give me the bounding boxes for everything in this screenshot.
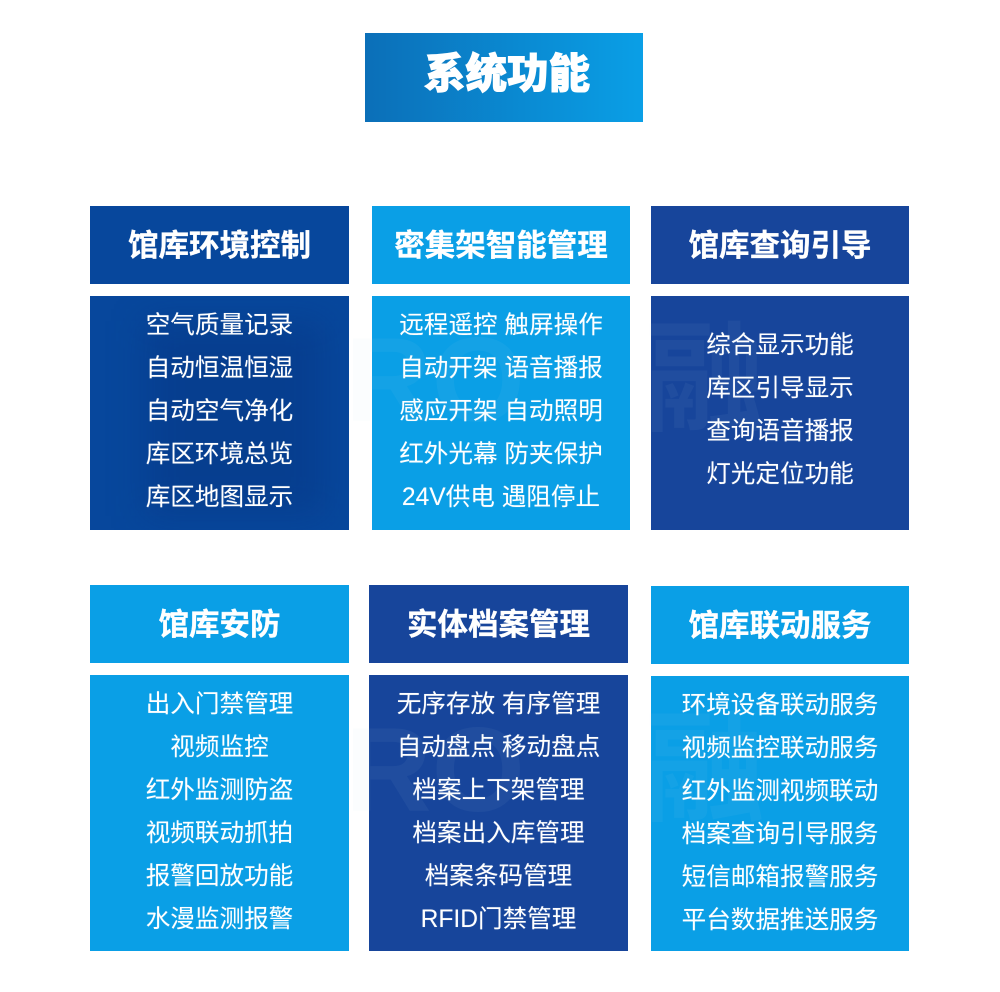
watermark: upper: RO 融 xyxy=(345,313,765,447)
panel body: 密集架智能管理 xyxy=(372,296,630,530)
panel header: 馆库联动服务 xyxy=(651,586,909,664)
panel header: 馆库安防: 馆库安防 xyxy=(158,608,280,642)
title banner xyxy=(365,33,643,122)
panel header: 馆库环境控制 xyxy=(90,206,349,284)
panel header: 实体档案管理: 实体档案管理 xyxy=(407,608,590,642)
panel header: 馆库查询引导 xyxy=(651,206,909,284)
panel header: 密集架智能管理: 密集架智能管理 xyxy=(394,229,608,263)
title banner: 系统功能 xyxy=(424,50,590,97)
panel body: 密集架智能管理: 远程遥控 触屏操作 xyxy=(399,312,603,339)
panel body: 实体档案管理: 档案条码管理 xyxy=(425,863,572,890)
panel body: 实体档案管理: 档案出入库管理 xyxy=(412,820,585,847)
panel header: 密集架智能管理 xyxy=(372,206,630,284)
watermark: lower: RO 融 xyxy=(345,703,765,837)
panel body: 馆库联动服务: 红外监测视频联动 xyxy=(682,778,878,805)
panel body: 馆库查询引导: 库区引导显示 xyxy=(706,375,854,402)
panel body: 馆库环境控制: 库区地图显示 xyxy=(146,484,293,511)
panel body: 馆库安防: 水漫监测报警 xyxy=(146,906,293,933)
panel body: 馆库联动服务 xyxy=(651,676,909,951)
panel header: 馆库环境控制: 馆库环境控制 xyxy=(128,229,311,263)
panel body: 密集架智能管理: 自动开架 语音播报 xyxy=(399,355,603,382)
panel body: 实体档案管理: 自动盘点 移动盘点 xyxy=(397,734,600,761)
panel body: 馆库查询引导 xyxy=(651,296,909,530)
panel header: 馆库联动服务: 馆库联动服务 xyxy=(688,609,872,643)
panel body: 密集架智能管理: 24V供电 遇阻停止 xyxy=(402,484,600,511)
panel body: 实体档案管理 xyxy=(369,675,628,951)
panel body: 实体档案管理: 档案上下架管理 xyxy=(412,777,585,804)
panel body: 馆库安防: 出入门禁管理 xyxy=(146,691,293,718)
panel body: 馆库联动服务: 短信邮箱报警服务 xyxy=(682,864,878,891)
panel body: 馆库环境控制 xyxy=(90,296,349,530)
panel body: 馆库环境控制: 库区环境总览 xyxy=(146,441,293,468)
panel body: 馆库查询引导: 综合显示功能 xyxy=(706,332,854,359)
panel body: 馆库环境控制: 自动空气净化 xyxy=(146,398,293,425)
panel body: 密集架智能管理: 红外光幕 防夹保护 xyxy=(399,441,603,468)
panel body: 馆库安防: 报警回放功能 xyxy=(146,863,293,890)
panel header: 实体档案管理 xyxy=(369,585,628,663)
panel body: 密集架智能管理: 感应开架 自动照明 xyxy=(399,398,603,425)
panel body: 馆库环境控制: 空气质量记录 xyxy=(146,312,293,339)
panel body: 馆库安防: 视频监控 xyxy=(170,734,269,761)
panel header: 馆库安防 xyxy=(90,585,349,663)
panel body: 馆库联动服务: 环境设备联动服务 xyxy=(682,692,878,719)
panel body: 馆库查询引导: 灯光定位功能 xyxy=(706,461,854,488)
panel body: 馆库联动服务: 视频监控联动服务 xyxy=(682,735,878,762)
panel body: 馆库联动服务: 档案查询引导服务 xyxy=(682,821,878,848)
panel body: 馆库安防: 视频联动抓拍 xyxy=(146,820,293,847)
panel body: 实体档案管理: RFID门禁管理 xyxy=(421,906,576,933)
panel body: 馆库环境控制: 自动恒温恒湿 xyxy=(146,355,293,382)
panel body: 馆库安防 xyxy=(90,675,349,951)
panel header: 馆库查询引导: 馆库查询引导 xyxy=(688,229,872,263)
panel body: 馆库联动服务: 平台数据推送服务 xyxy=(682,907,878,934)
panel body: 馆库查询引导: 查询语音播报 xyxy=(706,418,854,445)
panel body: 实体档案管理: 无序存放 有序管理 xyxy=(397,691,600,718)
panel body: 馆库安防: 红外监测防盗 xyxy=(146,777,293,804)
